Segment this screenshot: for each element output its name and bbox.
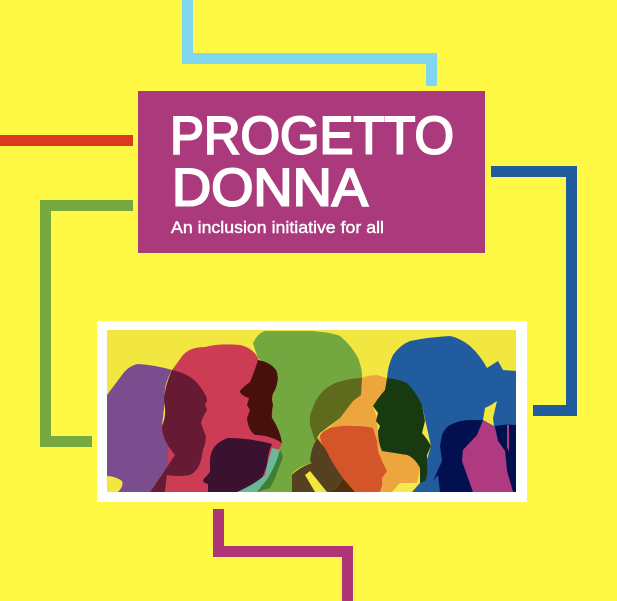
silhouette: pale yellow notch [392,483,417,492]
silhouette: purple head [107,364,175,492]
title [170,106,454,218]
silhouette: maroon face [150,370,207,492]
silhouette: yellow gap [483,401,497,426]
silhouette: brown face [240,360,282,443]
connector: green line [46,206,133,442]
connector: red line [0,135,133,146]
silhouette: magenta head [462,421,513,492]
silhouette: magenta strip [507,425,509,452]
silhouette: olive overlap [310,378,362,441]
image: overlapping head silhouettes [97,321,527,502]
silhouette: teal profile [237,448,280,492]
title panel [138,91,485,253]
connector: light blue line [188,0,432,86]
silhouette: navy head [433,420,483,492]
connector: magenta line [218,509,348,601]
subtitle: An inclusion initiative for all [171,219,384,237]
silhouette: blue head [387,336,516,492]
title: DONNA [172,158,369,218]
silhouette: red head [165,344,285,492]
silhouette: dark green profile [257,450,283,492]
title: PROGETTO [170,106,454,166]
silhouette: green head [253,331,362,492]
silhouette: orange-red head [320,426,387,492]
connector: blue line [491,172,572,410]
silhouette: dark brown overlap [292,438,343,492]
silhouette: dark plum head [203,438,272,492]
silhouette: orange head [317,375,420,492]
silhouette: dark green face [373,378,431,483]
silhouette: dark brown base [327,478,355,492]
silhouette: navy hair [495,425,516,492]
